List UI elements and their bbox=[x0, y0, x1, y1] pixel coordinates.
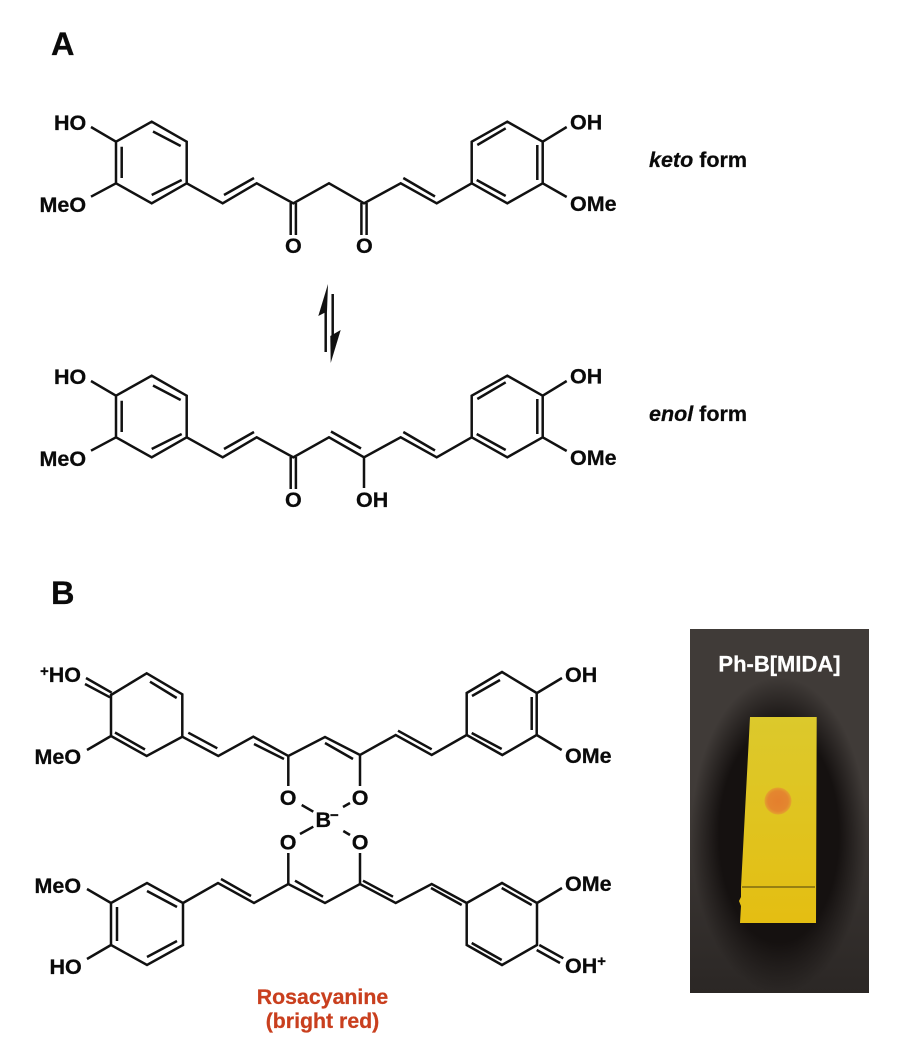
enol right aryl ring bbox=[472, 376, 567, 457]
rosacyanine atom labels: O bbox=[280, 786, 296, 810]
enol substituent labels: MeO bbox=[40, 447, 86, 471]
photo background bbox=[690, 629, 869, 993]
keto substituent labels bbox=[40, 110, 617, 258]
lower left aryl ring bbox=[87, 883, 183, 965]
rosacyanine atom labels: B bbox=[316, 808, 331, 832]
shadow around plate bbox=[691, 677, 867, 993]
rosacyanine atom labels: HO bbox=[49, 663, 81, 687]
upper chain bbox=[182, 731, 467, 786]
rosacyanine atom labels: MeO bbox=[34, 745, 81, 769]
enol left aryl ring bbox=[91, 376, 187, 457]
rosacyanine atom labels: OMe bbox=[565, 872, 612, 896]
equilibrium arrows bbox=[318, 284, 341, 363]
rosacyanine atom labels: O bbox=[280, 830, 296, 854]
keto substituent labels: OMe bbox=[570, 192, 617, 216]
rosacyanine caption: (bright red) bbox=[266, 1009, 379, 1033]
enol carbon chain bbox=[187, 432, 472, 489]
enol form label: enol form bbox=[649, 402, 747, 426]
panel label A: A bbox=[51, 26, 74, 62]
panel label B: B bbox=[51, 575, 74, 611]
rosacyanine atom labels: − bbox=[330, 807, 339, 824]
keto form structure bbox=[40, 110, 617, 258]
keto form label: keto form bbox=[649, 148, 747, 172]
rosacyanine atom labels bbox=[34, 663, 612, 979]
keto substituent labels: MeO bbox=[40, 193, 86, 217]
rosacyanine atom labels: OMe bbox=[565, 744, 612, 768]
rosacyanine atom labels: MeO bbox=[34, 874, 81, 898]
lower right quinoid ring bbox=[467, 883, 563, 965]
rosacyanine caption: Rosacyanine bbox=[257, 985, 388, 1009]
rosacyanine atom labels: O bbox=[352, 830, 368, 854]
TLC strip bbox=[739, 717, 817, 923]
rosacyanine atom labels: HO bbox=[50, 955, 82, 979]
enol substituent labels: O bbox=[285, 488, 302, 512]
enol substituent labels: HO bbox=[54, 365, 86, 389]
enol form structure bbox=[40, 364, 617, 512]
upper left quinoid ring bbox=[85, 673, 182, 756]
baseline mark bbox=[742, 886, 815, 888]
enol substituent labels: OH bbox=[356, 488, 388, 512]
orange spot bbox=[764, 788, 792, 814]
rosacyanine atom labels: + bbox=[40, 663, 49, 680]
upper right aryl ring bbox=[467, 672, 562, 755]
keto substituent labels: HO bbox=[54, 111, 86, 135]
enol substituent labels: OMe bbox=[570, 446, 617, 470]
photo title: Ph-B[MIDA] bbox=[718, 652, 841, 676]
keto right aryl ring bbox=[472, 122, 567, 203]
enol substituent labels bbox=[40, 364, 617, 512]
rosacyanine atom labels: OH bbox=[565, 663, 597, 687]
lower chain bbox=[183, 879, 467, 905]
enol substituent labels: OH bbox=[570, 364, 602, 388]
rosacyanine atom labels: OH bbox=[565, 954, 597, 978]
rosacyanine caption bbox=[257, 985, 388, 1033]
keto substituent labels: O bbox=[285, 234, 302, 258]
boron centre bonds bbox=[288, 803, 360, 884]
keto substituent labels: OH bbox=[570, 110, 602, 134]
rosacyanine structure bbox=[34, 663, 612, 979]
keto left aryl ring bbox=[91, 122, 187, 203]
rosacyanine atom labels: + bbox=[597, 953, 606, 970]
keto substituent labels: O bbox=[356, 234, 373, 258]
rosacyanine atom labels: O bbox=[352, 786, 368, 810]
keto carbon chain bbox=[187, 178, 472, 235]
TLC plate photo bbox=[690, 629, 869, 993]
